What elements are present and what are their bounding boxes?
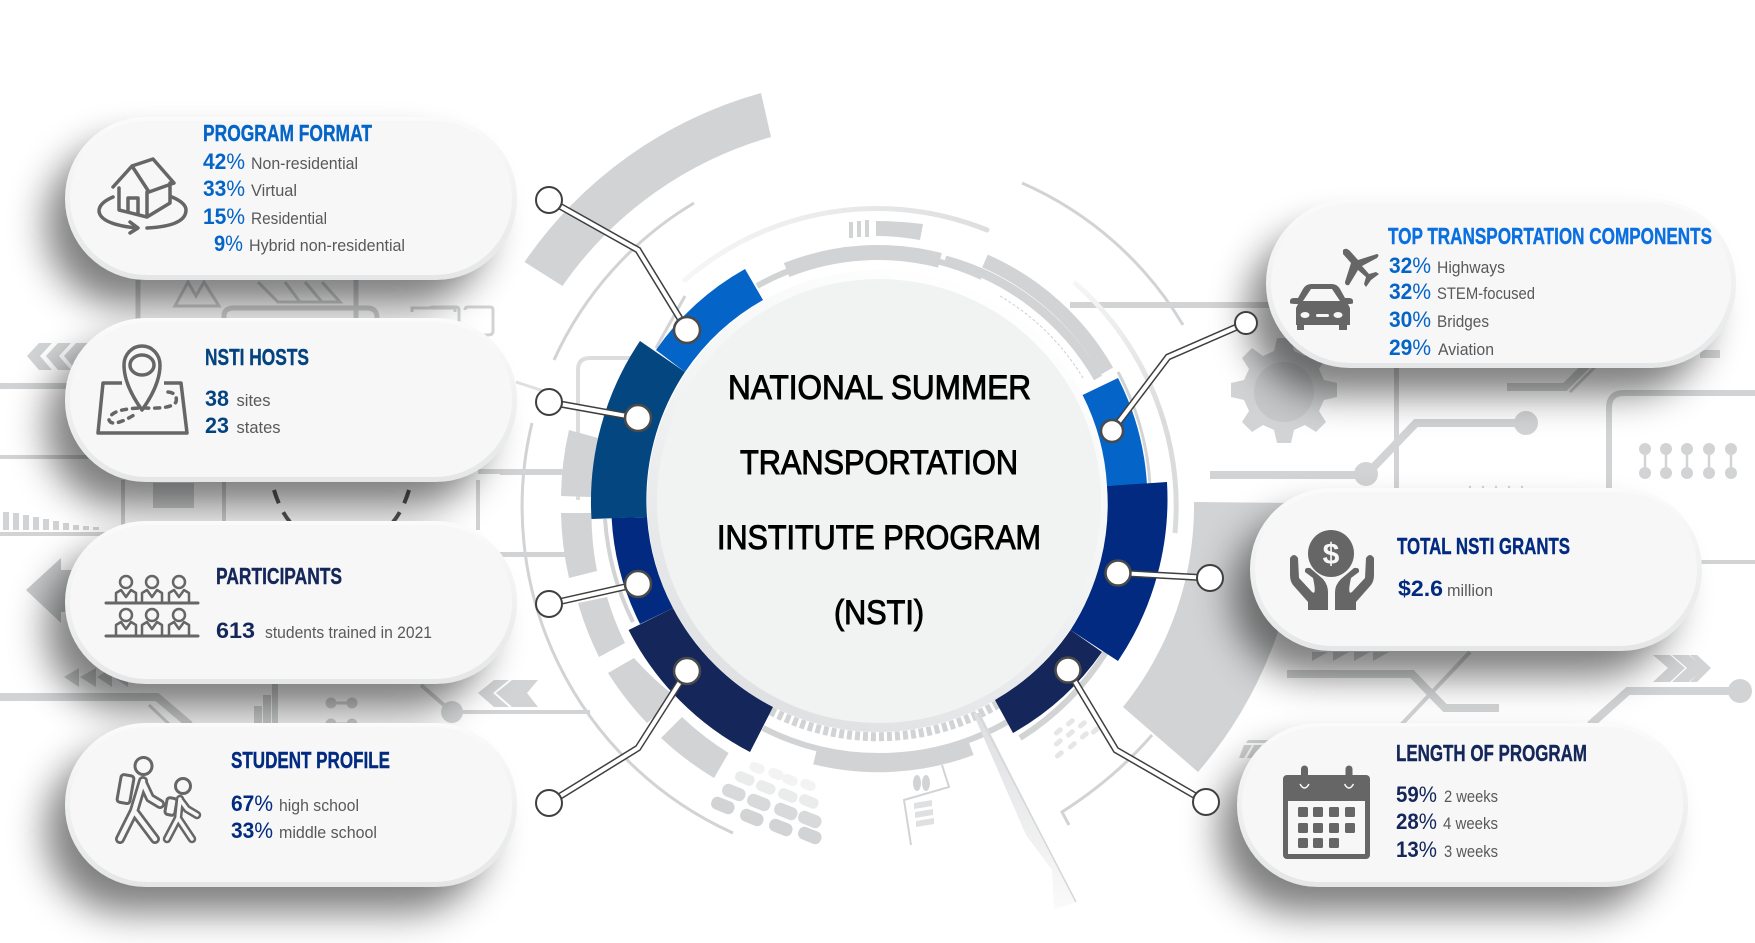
program format statistics: 42%: [203, 149, 245, 174]
icon: hands holding coin: $: [1323, 538, 1340, 571]
participants statistic: 613: [216, 618, 255, 643]
segment: length of program: [995, 630, 1102, 733]
panel: NSTI hosts: [46, 318, 517, 508]
program format statistics: Residential: [251, 210, 327, 228]
connector: program format: [536, 187, 700, 343]
panel: student profile: [46, 723, 517, 913]
program format statistics: [203, 149, 405, 256]
connector: participants: [536, 571, 651, 617]
length of program statistics: 3 weeks: [1444, 843, 1498, 861]
panel: participants: [46, 521, 517, 710]
connector: NSTI hosts: [536, 389, 651, 431]
length of program statistics: 28%: [1396, 809, 1437, 834]
transportation components statistics: Aviation: [1438, 341, 1494, 359]
program format statistics: 9%: [214, 231, 243, 256]
segment: NSTI hosts: [591, 341, 685, 519]
transportation components statistics: [1389, 253, 1535, 360]
central disc: [647, 270, 1109, 732]
NSTI hosts statistics: states: [236, 419, 280, 437]
length of program statistics: [1396, 782, 1498, 862]
heading: student profile: STUDENT PROFILE: [231, 747, 390, 773]
NSTI hosts statistics: 23: [205, 413, 229, 438]
icon: students walking: [117, 758, 197, 839]
heading: total NSTI grants: TOTAL NSTI GRANTS: [1397, 533, 1570, 559]
title: (NSTI): [834, 594, 924, 632]
program format statistics: 33%: [203, 176, 245, 201]
student profile statistics: [231, 791, 377, 843]
panel: top transportation components: [1248, 199, 1736, 395]
grants statistic: million: [1447, 582, 1493, 600]
length of program statistics: 2 weeks: [1444, 788, 1498, 806]
length of program statistics: 4 weeks: [1443, 815, 1498, 833]
student profile statistics: 33%: [231, 818, 273, 843]
transportation components statistics: 32%: [1389, 279, 1431, 304]
segment: participants: [612, 517, 673, 624]
student profile statistics: 67%: [231, 791, 273, 816]
title: TRANSPORTATION: [740, 444, 1018, 482]
icon: students at desks: [106, 576, 198, 636]
grants statistic: [1398, 576, 1493, 601]
NSTI hosts statistics: 38: [205, 386, 229, 411]
transportation components statistics: Bridges: [1437, 313, 1489, 331]
panel: program format: [46, 117, 517, 306]
panel: total NSTI grants: [1232, 488, 1702, 677]
icon: house with rotating arrow: [99, 159, 186, 233]
icon: calendar: [1283, 769, 1370, 859]
student profile statistics: middle school: [279, 824, 377, 842]
decorative gray technology rings: [522, 93, 1300, 910]
heading: participants: PARTICIPANTS: [216, 563, 342, 589]
NSTI hosts statistics: sites: [236, 392, 270, 410]
connector: total NSTI grants: [1106, 560, 1223, 591]
heading: NSTI hosts: NSTI HOSTS: [205, 344, 309, 370]
title: NATIONAL SUMMER: [728, 369, 1031, 407]
ring segments: [591, 269, 1167, 752]
title: [717, 369, 1041, 632]
transportation components statistics: 32%: [1389, 253, 1431, 278]
student profile statistics: high school: [279, 797, 359, 815]
connector: top transportation components: [1101, 312, 1257, 442]
icon: hands holding coin: [1290, 530, 1374, 610]
gear: [1231, 338, 1337, 443]
connector: length of program: [1056, 658, 1219, 815]
grants statistic: $2.6: [1398, 576, 1443, 601]
background circuit pattern: [0, 270, 1755, 758]
transportation components statistics: 30%: [1389, 307, 1431, 332]
icon: plane and car: [1290, 249, 1379, 330]
NSTI hosts statistics: [205, 386, 280, 438]
program format statistics: 15%: [203, 204, 245, 229]
title: INSTITUTE PROGRAM: [717, 519, 1041, 557]
transportation components statistics: STEM-focused: [1437, 285, 1535, 303]
length of program statistics: 59%: [1396, 782, 1437, 807]
transportation components statistics: Highways: [1437, 259, 1505, 277]
participants statistic: students trained in 2021: [265, 624, 432, 642]
panel: length of program: [1219, 723, 1688, 913]
segment: total NSTI grants: [1070, 482, 1167, 661]
heading: length of program: LENGTH OF PROGRAM: [1396, 740, 1587, 766]
heading: program format: PROGRAM FORMAT: [203, 120, 372, 146]
icon: map with location pin: [98, 346, 187, 433]
length of program statistics: 13%: [1396, 837, 1437, 862]
segment: top transportation components: [1083, 378, 1147, 486]
program format statistics: Virtual: [251, 182, 297, 200]
connector: student profile: [536, 658, 700, 816]
program format statistics: Non-residential: [251, 155, 358, 173]
segment: student profile: [629, 608, 773, 752]
participants statistic: [216, 618, 432, 643]
transportation components statistics: 29%: [1389, 335, 1431, 360]
program format statistics: Hybrid non-residential: [249, 237, 405, 255]
segment: program format: [656, 269, 763, 372]
